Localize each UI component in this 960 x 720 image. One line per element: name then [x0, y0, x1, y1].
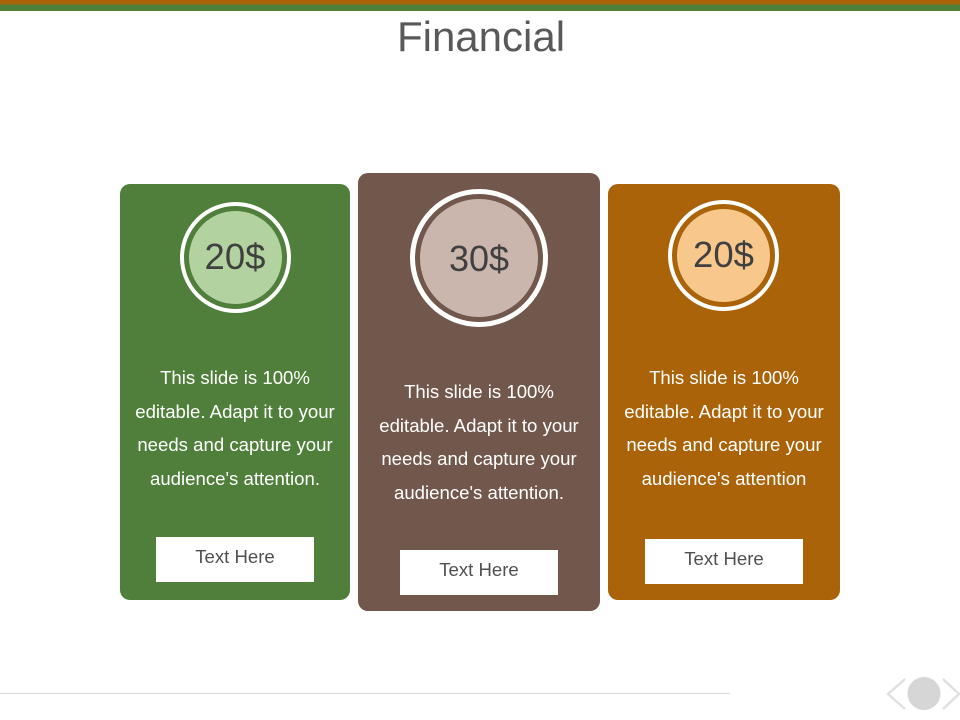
text block [624, 367, 824, 489]
text block: audience's attention [642, 468, 806, 489]
title: Financial [397, 13, 565, 60]
price: 20$: 20$ [693, 234, 754, 275]
icon: navigation arrows [886, 677, 960, 710]
button [156, 537, 314, 582]
button [645, 539, 803, 584]
text block: needs and capture your [626, 434, 822, 455]
price: 30$: 30$ [449, 238, 509, 279]
text block: This slide is 100% [160, 367, 310, 388]
text block: audience's attention. [150, 468, 320, 489]
text block: needs and capture your [137, 434, 333, 455]
icon: price ring 30$ [410, 189, 548, 327]
button: Text Here [684, 548, 764, 569]
icon: price ring 20$ [668, 200, 779, 311]
text block: editable. Adapt it to your [135, 401, 335, 422]
price disc [189, 211, 282, 304]
text block [379, 381, 579, 503]
text block [135, 367, 335, 489]
footer line [0, 693, 730, 694]
text block: This slide is 100% [404, 381, 554, 402]
button: Text Here [439, 559, 519, 580]
price disc [677, 209, 770, 302]
text block: This slide is 100% [649, 367, 799, 388]
button [400, 550, 558, 595]
button: Text Here [195, 546, 275, 567]
text block: needs and capture your [381, 448, 577, 469]
panel: orange card [608, 184, 840, 600]
text block: editable. Adapt it to your [624, 401, 824, 422]
price: 20$: 20$ [205, 236, 265, 277]
top band [0, 0, 960, 11]
price disc [420, 199, 538, 317]
text block: editable. Adapt it to your [379, 415, 579, 436]
panel: brown card [358, 173, 600, 611]
panel: green card [120, 184, 350, 600]
icon: price ring 20$ [180, 202, 291, 313]
text block: audience's attention. [394, 482, 564, 503]
